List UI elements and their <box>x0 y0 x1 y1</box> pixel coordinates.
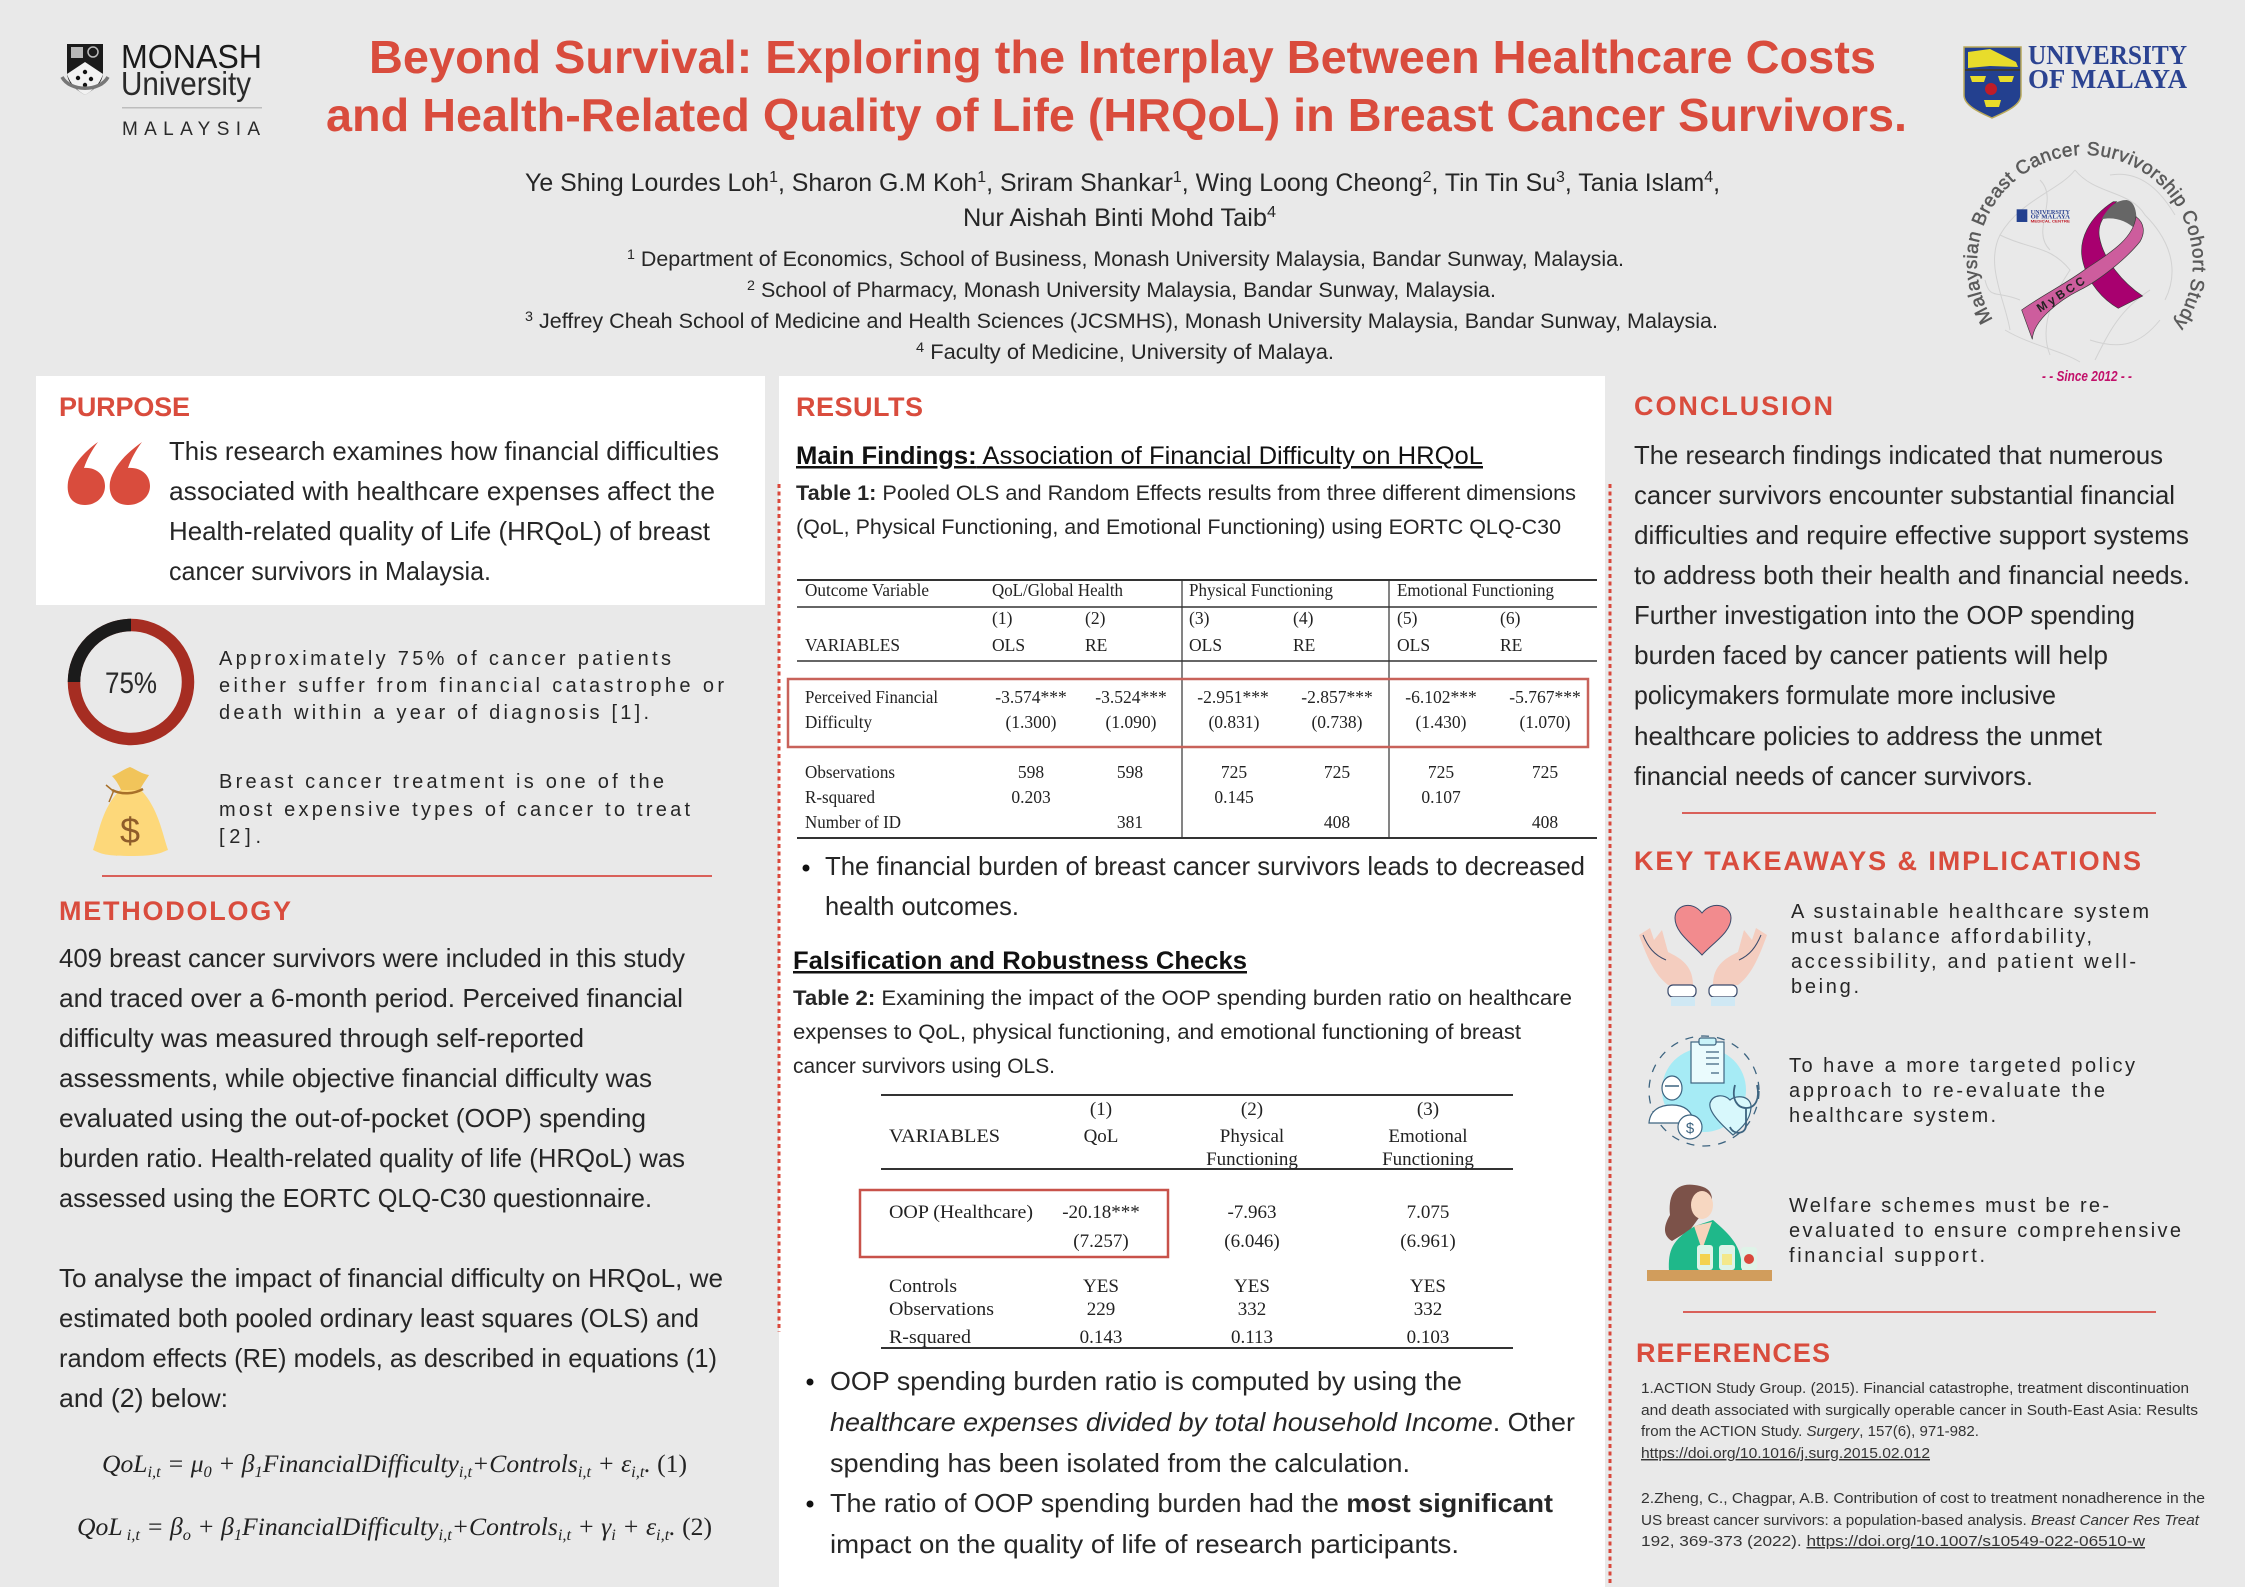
authors: , Tin Tin Su <box>1431 169 1556 197</box>
equation 2: + γ <box>571 1514 612 1541</box>
text: 75% statistic <box>219 648 724 724</box>
table 1: -2.951*** <box>1197 687 1269 707</box>
text: takeaway 1: being. <box>1791 976 1859 998</box>
text: takeaway 2: healthcare system. <box>1789 1105 1996 1127</box>
equation 2: FinancialDifficulty <box>241 1514 439 1541</box>
logo: MyBCC cohort study: MEDICAL CENTRE <box>2031 220 2071 224</box>
text: methodology paragraph 1 <box>59 943 685 1213</box>
affiliations: Jeffrey Cheah School of Medicine and Health Sciences (JCSMHS), Monash University Malaysia, Bandar Sunway, Malaysia. <box>533 310 1718 333</box>
logo: MyBCC cohort study: - - Since 2012 - - <box>2042 368 2132 385</box>
equation 1: . <box>644 1451 657 1478</box>
authors <box>525 169 1720 232</box>
text: conclusion: The research findings indicated that numerous <box>1634 440 2163 470</box>
table 1: (1.430) <box>1415 712 1467 732</box>
text: table 2 caption: Table 2: Examining the impact of the OOP spending burden ratio on healthcare <box>793 987 1572 1010</box>
table 2: (7.257) <box>1073 1231 1129 1252</box>
table 1 <box>788 580 1597 838</box>
table 1: RE <box>1500 635 1522 655</box>
table 2: Emotional <box>1388 1126 1468 1147</box>
logo: MyBCC cohort study: OF MALAYA <box>2031 215 2071 221</box>
authors: 4 <box>1267 204 1276 221</box>
table 1: (5) <box>1397 608 1418 628</box>
panel: purpose <box>36 376 765 605</box>
icon: money bag <box>93 767 168 856</box>
table 1: (1) <box>992 608 1013 628</box>
text: conclusion: financial needs of cancer survivors. <box>1634 761 2033 791</box>
authors: 1 <box>1173 169 1182 186</box>
text: reference 1: and death associated with surgically operable cancer in South-East Asia: Results <box>1641 1403 2198 1419</box>
text: methodology paragraph 2: To analyse the impact of financial difficulty on HRQoL, we <box>59 1263 723 1293</box>
table 2: 229 <box>1087 1299 1115 1320</box>
equation 2: i,t <box>656 1527 670 1544</box>
authors: 3 <box>1556 169 1565 186</box>
table 1: Observations <box>805 762 895 782</box>
chart: 75% donut: 75% <box>105 667 157 700</box>
table 2: (2) <box>1241 1099 1263 1120</box>
table 1: -3.524*** <box>1095 687 1167 707</box>
text: takeaway 3 <box>1789 1195 2181 1267</box>
table 1: (0.831) <box>1208 712 1260 732</box>
logo: MyBCC cohort study: MyBCC <box>2034 272 2090 315</box>
icon: woman saving money in jars <box>1647 1185 1772 1281</box>
text: table 2 caption <box>793 987 1572 1078</box>
authors: , <box>1713 169 1720 197</box>
text: treatment cost statistic: [2]. <box>219 826 261 848</box>
title: and Health-Related Quality of Life (HRQoL) in Breast Cancer Survivors. <box>326 89 1907 141</box>
table 2: 0.143 <box>1080 1327 1122 1348</box>
bullet: most significant impact: The ratio of OOP spending burden had the most significant <box>830 1488 1553 1518</box>
table 2: YES <box>1234 1276 1270 1297</box>
table 1: QoL/Global Health <box>992 580 1123 600</box>
equation 2: (2) <box>682 1514 712 1541</box>
text: 75% statistic: either suffer from financial catastrophe or <box>219 675 724 697</box>
table 2: 332 <box>1238 1299 1266 1320</box>
table 1: 0.145 <box>1214 787 1254 807</box>
text: methodology paragraph 1: burden ratio. Health-related quality of life (HRQoL) was <box>59 1143 685 1173</box>
table 2: QoL <box>1084 1126 1118 1147</box>
text: conclusion <box>1634 440 2190 791</box>
table 1: R-squared <box>805 787 875 807</box>
text: conclusion: difficulties and require effective support systems <box>1634 520 2189 550</box>
text: methodology paragraph 1: and traced over a 6-month period. Perceived financial <box>59 983 683 1013</box>
table 2: VARIABLES <box>889 1126 1000 1147</box>
equation 2: i <box>611 1527 616 1544</box>
equation 1: + ε <box>591 1451 631 1478</box>
authors: , Wing Loong Cheong <box>1182 169 1423 197</box>
text: takeaway 2 <box>1789 1055 2135 1127</box>
equation 1: = μ <box>161 1451 204 1478</box>
table 2: 0.103 <box>1407 1327 1449 1348</box>
text: conclusion: to address both their health and financial needs. <box>1634 560 2190 590</box>
table 1: OLS <box>992 635 1025 655</box>
heading: methodology: METHODOLOGY <box>59 896 291 926</box>
text: takeaway 3: financial support. <box>1789 1245 1985 1267</box>
affiliations: 4 <box>916 339 924 355</box>
table 2: (1) <box>1090 1099 1112 1120</box>
equation 1: FinancialDifficulty <box>262 1451 460 1478</box>
table 2: Functioning <box>1382 1149 1474 1170</box>
table 1: Physical Functioning <box>1189 580 1333 600</box>
text: methodology paragraph 2: random effects (RE) models, as described in equations (1) <box>59 1343 717 1373</box>
text: takeaway 1: accessibility, and patient well- <box>1791 951 2136 973</box>
text: table 1 caption <box>796 482 1576 539</box>
table 2: Physical <box>1220 1126 1284 1147</box>
table 2: 332 <box>1414 1299 1442 1320</box>
table 2: Functioning <box>1206 1149 1298 1170</box>
text: reference 2 <box>1641 1491 2205 1550</box>
table 1: 0.107 <box>1421 787 1461 807</box>
equation 1: (1) <box>657 1451 687 1478</box>
text: takeaway 2: approach to re-evaluate the <box>1789 1080 2105 1102</box>
logo: Monash University Malaysia: MALAYSIA <box>122 119 260 140</box>
authors: Nur Aishah Binti Mohd Taib <box>963 204 1263 232</box>
bullet: OOP burden ratio: spending has been isolated from the calculation. <box>830 1448 1410 1478</box>
logo: Monash University Malaysia: MONASH <box>121 38 262 75</box>
text: takeaway 1 <box>1791 901 2149 998</box>
table 1: -5.767*** <box>1509 687 1581 707</box>
bullet: most significant impact <box>806 1488 1553 1559</box>
logo: MyBCC cohort study: Malaysian Breast Cancer Survivorship Cohort Study <box>1963 142 2206 330</box>
table 1: (1.300) <box>1005 712 1057 732</box>
table 1: 725 <box>1428 762 1454 782</box>
table 1: 725 <box>1324 762 1350 782</box>
text: conclusion: Further investigation into the OOP spending <box>1634 600 2135 630</box>
table 1: 725 <box>1221 762 1247 782</box>
equation 2: i,t <box>558 1527 572 1544</box>
equation 2: = β <box>140 1514 183 1541</box>
table 1: -3.574*** <box>995 687 1067 707</box>
table 1: -2.857*** <box>1301 687 1373 707</box>
heading: results: RESULTS <box>796 392 923 422</box>
title <box>326 31 1907 141</box>
equation 2: i,t <box>123 1527 140 1544</box>
text: reference 1: 1.ACTION Study Group. (2015). Financial catastrophe, treatment discontinuation <box>1641 1381 2189 1397</box>
table 2: (6.961) <box>1400 1231 1456 1252</box>
icon: doctor, clipboard and stethoscope <box>1649 1036 1759 1146</box>
table 1: (3) <box>1189 608 1210 628</box>
logo: University of Malaya <box>1964 40 2187 118</box>
equation 1: i,t <box>459 1464 473 1481</box>
text: methodology paragraph 2: and (2) below: <box>59 1383 228 1413</box>
callout: highlighted OOP cell <box>860 1190 1168 1257</box>
text: reference 2: US breast cancer survivors: a population-based analysis. Breast Cancer Res Treat <box>1641 1513 2200 1529</box>
heading: references: REFERENCES <box>1636 1338 1830 1368</box>
table 1: Number of ID <box>805 812 901 832</box>
text: takeaway 3: Welfare schemes must be re- <box>1789 1195 2109 1217</box>
equation 2: . <box>669 1514 682 1541</box>
equation 1: +Controls <box>472 1451 578 1478</box>
equation 2: +Controls <box>452 1514 558 1541</box>
table 2: (6.046) <box>1224 1231 1280 1252</box>
affiliations <box>525 246 1718 364</box>
text: 75% statistic: death within a year of diagnosis [1]. <box>219 702 649 724</box>
table 1: Difficulty <box>805 712 872 732</box>
text: methodology paragraph 1: evaluated using the out-of-pocket (OOP) spending <box>59 1103 646 1133</box>
equation 1: 1 <box>255 1464 263 1481</box>
equation 1: i,t <box>578 1464 592 1481</box>
bullet: OOP burden ratio: OOP spending burden ratio is computed by using the <box>830 1366 1462 1396</box>
text: table 1 caption: Table 1: Pooled OLS and Random Effects results from three different dimensions <box>796 482 1576 505</box>
equation 2: 1 <box>234 1527 242 1544</box>
bullet: financial burden: The financial burden of breast cancer survivors leads to decreased <box>825 851 1585 881</box>
heading: purpose: PURPOSE <box>59 392 190 422</box>
equation 1: i,t <box>147 1464 161 1481</box>
text: takeaway 3: evaluated to ensure comprehensive <box>1789 1220 2181 1242</box>
authors: 1 <box>977 169 986 186</box>
table 1: OLS <box>1397 635 1430 655</box>
authors: Ye Shing Lourdes Loh <box>525 169 770 197</box>
text: reference 2: 192, 369-373 (2022). https://doi.org/10.1007/s10549-022-06510-w <box>1641 1534 2146 1550</box>
authors: , Sharon G.M Koh <box>778 169 977 197</box>
table 1: Perceived Financial <box>805 687 938 707</box>
table 2 <box>860 1095 1513 1348</box>
table 2: 0.113 <box>1231 1327 1273 1348</box>
bullet: financial burden: health outcomes. <box>825 891 1019 921</box>
text: methodology paragraph 2 <box>59 1263 723 1413</box>
text: takeaway 1: A sustainable healthcare system <box>1791 901 2149 923</box>
text: reference 1: from the ACTION Study. Surgery, 157(6), 971-982. <box>1641 1424 1979 1440</box>
table 2: 7.075 <box>1407 1202 1449 1223</box>
table 1: 381 <box>1117 812 1143 832</box>
equation 2: + β <box>191 1514 234 1541</box>
affiliations: 3 <box>525 308 533 324</box>
table 1: 598 <box>1117 762 1143 782</box>
affiliations: 2 <box>747 277 755 293</box>
text: reference 1: https://doi.org/10.1016/j.surg.2015.02.012 <box>1641 1446 1930 1462</box>
authors: , Sriram Shankar <box>986 169 1173 197</box>
heading: key takeaways: KEY TAKEAWAYS & IMPLICATIONS <box>1634 846 2141 876</box>
authors: 1 <box>769 169 778 186</box>
table 2: OOP (Healthcare) <box>889 1202 1033 1223</box>
equation 1: + β <box>212 1451 255 1478</box>
table 2: YES <box>1410 1276 1446 1297</box>
bullet: financial burden <box>802 851 1585 921</box>
table 2: Observations <box>889 1299 994 1320</box>
chart: 75% donut <box>74 625 188 739</box>
table 1: 0.203 <box>1011 787 1051 807</box>
callout: highlighted row <box>788 679 1588 747</box>
text: treatment cost statistic: most expensive types of cancer to treat <box>219 799 690 821</box>
table 2: YES <box>1083 1276 1119 1297</box>
table 1: RE <box>1085 635 1107 655</box>
equation 1: i,t <box>631 1464 645 1481</box>
text: conclusion: burden faced by cancer patients will help <box>1634 640 2108 670</box>
text: purpose statement: cancer survivors in Malaysia. <box>169 556 491 586</box>
table 1: (2) <box>1085 608 1106 628</box>
bullet: most significant impact: impact on the quality of life of research participants. <box>830 1529 1459 1559</box>
text: table 2 caption: expenses to QoL, physical functioning, and emotional functioning of breast <box>793 1021 1521 1044</box>
text: purpose statement: This research examines how financial difficulties <box>169 436 719 466</box>
equation 2: QoL <box>77 1514 121 1541</box>
text: methodology paragraph 1: assessed using the EORTC QLQ-C30 questionnaire. <box>59 1183 652 1213</box>
table 1: (4) <box>1293 608 1314 628</box>
logo: Monash University Malaysia: University <box>121 65 251 102</box>
equation 2: i,t <box>439 1527 452 1544</box>
authors: 4 <box>1704 169 1713 186</box>
icon: hands holding heart <box>1639 905 1767 1006</box>
text: conclusion: cancer survivors encounter substantial financial <box>1634 480 2175 510</box>
table 1: 725 <box>1532 762 1558 782</box>
equation 2: + ε <box>616 1514 656 1541</box>
table 2: Controls <box>889 1276 957 1297</box>
logo: MyBCC cohort study: UNIVERSITY <box>2031 210 2071 216</box>
icon: doctor, clipboard and stethoscope: $ <box>1686 1120 1695 1137</box>
title: Beyond Survival: Exploring the Interplay Between Healthcare Costs <box>369 31 1876 83</box>
affiliations: 1 <box>627 246 635 262</box>
text: table 2 caption: cancer survivors using OLS. <box>793 1055 1055 1078</box>
subheading: main findings: Main Findings: Association of Financial Difficulty on HRQoL <box>796 442 1483 470</box>
text: treatment cost statistic: Breast cancer treatment is one of the <box>219 771 664 793</box>
table 2: -20.18*** <box>1062 1202 1140 1223</box>
text: table 1 caption: (QoL, Physical Functioning, and Emotional Functioning) using EORTC QLQ-C30 <box>796 516 1561 539</box>
text: purpose statement <box>169 436 719 586</box>
affiliations: Department of Economics, School of Business, Monash University Malaysia, Bandar Sunway, Malaysia. <box>635 248 1624 271</box>
table 1: (0.738) <box>1311 712 1363 732</box>
logo: Monash University Malaysia <box>62 38 262 140</box>
table 1: Outcome Variable <box>805 580 929 600</box>
text: methodology paragraph 1: difficulty was measured through self-reported <box>59 1023 584 1053</box>
affiliations: Faculty of Medicine, University of Malaya. <box>924 341 1334 364</box>
table 1: (6) <box>1500 608 1521 628</box>
logo: University of Malaya: OF MALAYA <box>2028 64 2187 94</box>
table 1: VARIABLES <box>805 635 900 655</box>
text: purpose statement: associated with healthcare expenses affect the <box>169 476 715 506</box>
text: conclusion: policymakers formulate more inclusive <box>1634 680 2056 710</box>
subheading: falsification: Falsification and Robustness Checks <box>793 947 1247 975</box>
text: conclusion: healthcare policies to address the unmet <box>1634 721 2103 751</box>
table 1: 408 <box>1532 812 1558 832</box>
authors: 2 <box>1423 169 1432 186</box>
bullet: OOP burden ratio <box>806 1366 1575 1478</box>
text: takeaway 1: must balance affordability, <box>1791 926 2092 948</box>
table 2: -7.963 <box>1227 1202 1277 1223</box>
text: methodology paragraph 1: assessments, while objective financial difficulty was <box>59 1063 652 1093</box>
table 1: (1.090) <box>1105 712 1157 732</box>
equation 1: QoL <box>102 1451 146 1478</box>
icon: money bag: $ <box>120 810 140 851</box>
table 1: (1.070) <box>1519 712 1571 732</box>
equation 2: o <box>183 1527 191 1544</box>
heading: conclusion: CONCLUSION <box>1634 391 1833 421</box>
table 1: Emotional Functioning <box>1397 580 1554 600</box>
logo: University of Malaya: UNIVERSITY <box>2028 40 2187 70</box>
text: takeaway 2: To have a more targeted policy <box>1789 1055 2135 1077</box>
table 1: 598 <box>1018 762 1044 782</box>
text: 75% statistic: Approximately 75% of cancer patients <box>219 648 671 670</box>
text: purpose statement: Health-related quality of Life (HRQoL) of breast <box>169 516 711 546</box>
authors: , Tania Islam <box>1565 169 1704 197</box>
text: treatment cost statistic <box>219 771 690 848</box>
table 1: -6.102*** <box>1405 687 1477 707</box>
text: methodology paragraph 2: estimated both pooled ordinary least squares (OLS) and <box>59 1303 699 1333</box>
text: reference 1 <box>1641 1381 2198 1462</box>
text: methodology paragraph 1: 409 breast cancer survivors were included in this study <box>59 943 685 973</box>
icon: quote mark <box>68 442 150 505</box>
table 2: (3) <box>1417 1099 1439 1120</box>
panel: results <box>779 376 1610 1587</box>
bullet: OOP burden ratio: healthcare expenses divided by total household Income . Other <box>830 1407 1575 1437</box>
table 1: 408 <box>1324 812 1350 832</box>
table 2: R-squared <box>889 1327 972 1348</box>
text: reference 2: 2.Zheng, C., Chagpar, A.B. Contribution of cost to treatment nonadherence in the <box>1641 1491 2205 1507</box>
table 1: RE <box>1293 635 1315 655</box>
equation 1: 0 <box>204 1464 212 1481</box>
table 1: OLS <box>1189 635 1222 655</box>
affiliations: School of Pharmacy, Monash University Malaysia, Bandar Sunway, Malaysia. <box>755 279 1496 302</box>
